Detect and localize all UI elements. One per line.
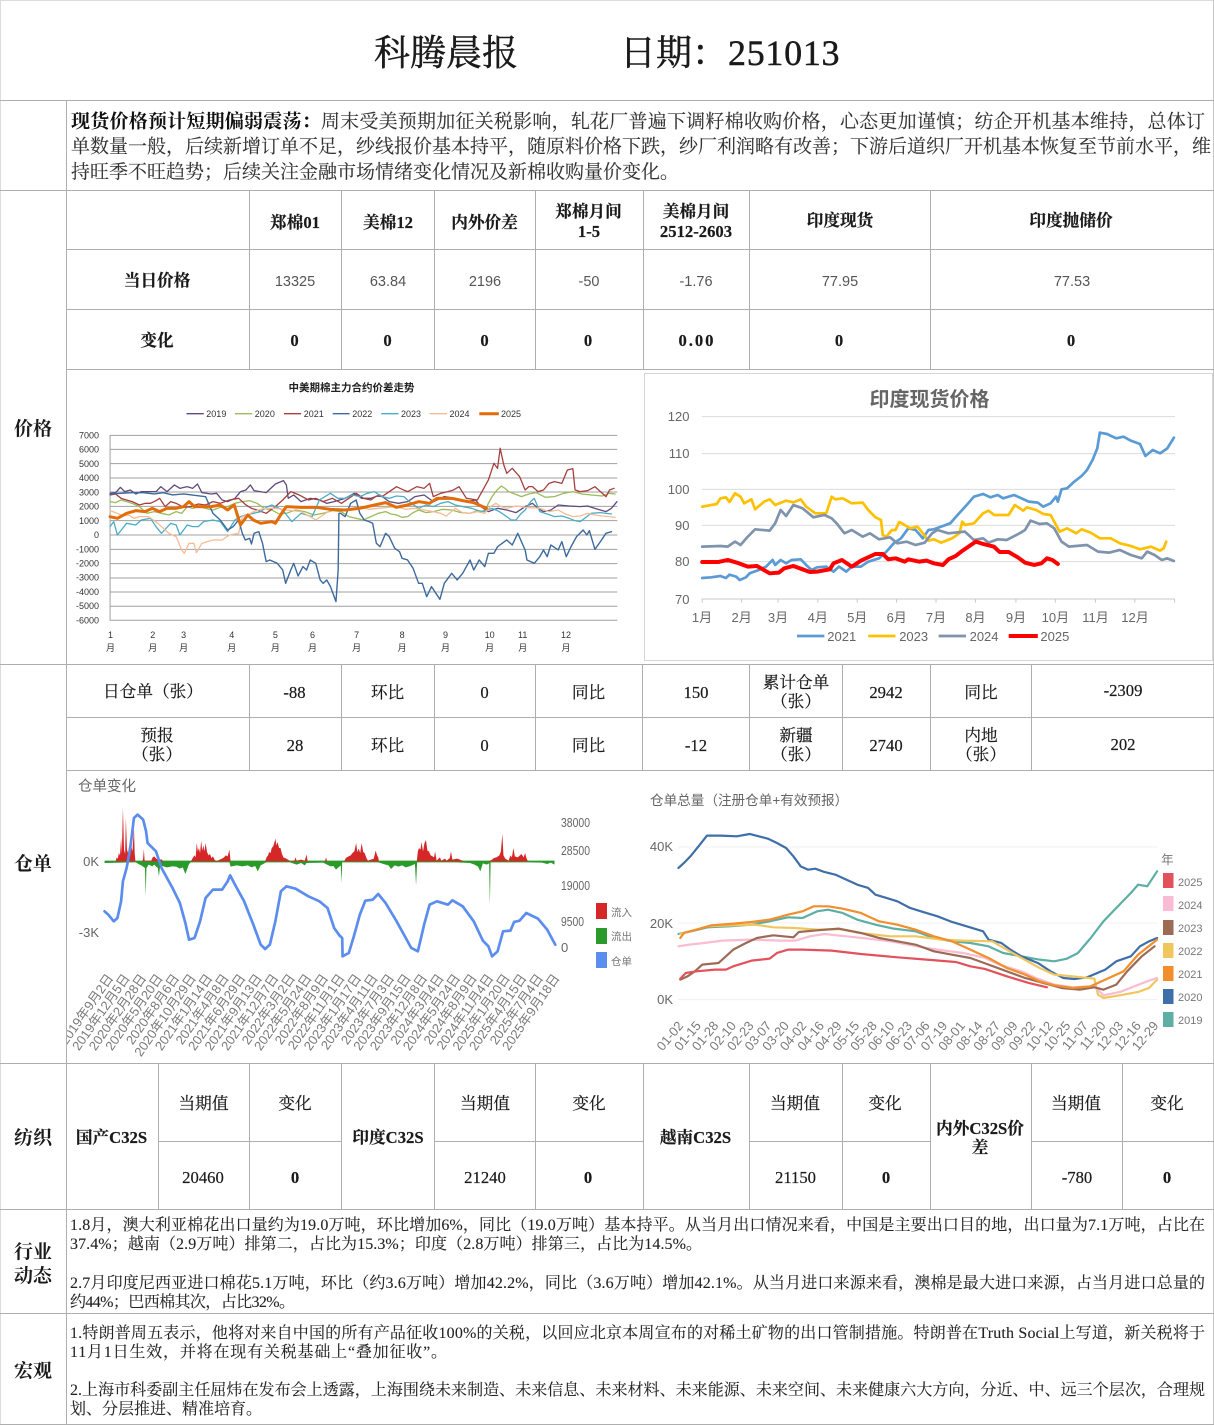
legend: 2025 — [1040, 629, 1069, 644]
daily receipts row: 累计仓单 — [763, 673, 830, 692]
section label: textile: 纺织 — [14, 1127, 54, 1149]
x axis labels — [692, 610, 1149, 625]
rotated date labels: 06-23 — [882, 1018, 915, 1053]
rotated date labels: 2021年4月8日 — [172, 971, 232, 1047]
right axis labels — [561, 815, 590, 955]
current price row — [124, 270, 1090, 290]
forecast row: -12 — [685, 736, 707, 755]
section label: price: 价格 — [14, 418, 52, 440]
summary paragraph: 现货价格预计短期偏弱震荡：周末受美预期加征关税影响，轧花厂普遍下调籽棉收购价格，心态更加谨慎；纺企开机基本维持，总体订 — [71, 110, 1205, 132]
forecast row: 环比 — [371, 736, 404, 755]
x axis month labels: 12 — [561, 630, 571, 640]
rotated date labels: 2020年8月6日 — [123, 971, 182, 1047]
price table — [124, 201, 1113, 350]
Vietnam C32S: 当期值 — [770, 1094, 820, 1113]
legend: 2021 — [304, 409, 324, 419]
y axis labels — [668, 409, 690, 607]
x axis month labels: 8 — [400, 630, 405, 640]
daily receipts row: -2309 — [1104, 681, 1142, 700]
y axis labels: -6000 — [76, 615, 99, 625]
x axis labels: 1月 — [692, 610, 712, 625]
rotated date labels: 2022年8月9日 — [272, 971, 331, 1047]
x axis month labels: 4 — [229, 630, 234, 640]
India C32S: 0 — [584, 1168, 592, 1187]
x axis month labels: 2 — [150, 630, 155, 640]
daily receipts row: 同比 — [964, 683, 998, 702]
India C32S: 印度C32S — [352, 1128, 424, 1147]
y axis labels: 120 — [668, 409, 690, 424]
section label: industry news: 动态 — [14, 1265, 54, 1287]
x axis month labels: 月 — [398, 643, 407, 653]
legend: 2025 — [501, 409, 521, 419]
y axis labels: 0 — [94, 530, 99, 540]
forecast row: 新疆 — [779, 726, 813, 745]
rotated date labels: 07-06 — [900, 1018, 933, 1053]
domestic vs overseas C32S spread: 0 — [1163, 1168, 1171, 1187]
domestic vs overseas C32S spread: -780 — [1062, 1168, 1092, 1187]
summary paragraph: 单数量一般，后续新增订单不足，纱线报价基本持平，随原料价格下跌，纱厂利润略有改善；下游后道织厂开机基本恢复至节前水平，维 — [71, 134, 1211, 158]
table header row: 印度现货 — [807, 210, 876, 230]
table header row: 郑棉01 — [270, 212, 320, 232]
x axis labels: 9月 — [1006, 610, 1026, 625]
rotated date labels: 01-28 — [689, 1018, 721, 1053]
rotated date labels: 02-10 — [706, 1018, 739, 1053]
y axis labels: 7000 — [79, 430, 99, 440]
chart: India spot price — [644, 374, 1212, 660]
forecast row: 预报 — [140, 726, 174, 745]
plot lines — [678, 834, 1157, 1000]
forecast row: 28 — [287, 736, 303, 755]
forecast row: （张） — [132, 745, 182, 764]
rotated date labels: 11-20 — [1076, 1018, 1109, 1053]
legend: 流出 — [611, 930, 632, 943]
table header row: 2512-2603 — [660, 222, 732, 241]
rotated date labels: 09-22 — [1005, 1018, 1038, 1053]
legend — [596, 903, 632, 968]
daily receipts row: -88 — [283, 683, 306, 702]
x axis month labels: 月 — [352, 643, 361, 653]
India C32S: 当期值 — [460, 1094, 510, 1113]
macro news text: 11月1日生效，并将在现有关税基础上“叠加征收”。 — [70, 1343, 447, 1361]
daily receipts row: 2942 — [869, 683, 903, 702]
macro news text: 划、分层推进、精准培育。 — [70, 1399, 262, 1418]
summary paragraph: 持旺季不旺趋势；后续关注金融市场情绪变化情况及新棉收购量价变化。 — [71, 161, 679, 183]
rotated date labels: 2023年7月3日 — [338, 971, 397, 1047]
rotated date labels: 08-14 — [953, 1018, 985, 1053]
x axis labels: 5月 — [847, 610, 867, 625]
legend — [1161, 853, 1202, 1027]
chart: total warehouse receipts — [650, 793, 1202, 1053]
domestic C32S — [76, 1094, 312, 1187]
title: 科腾晨报 — [374, 33, 518, 73]
x axis month labels: 9 — [443, 630, 448, 640]
bars and inventory line — [105, 807, 555, 956]
legend: 2019 — [1178, 1015, 1202, 1027]
rotated date labels: 2024年11月4日 — [433, 971, 496, 1052]
change row: 变化 — [140, 331, 174, 350]
rotated date labels: 2021年9月13日 — [201, 971, 265, 1053]
industry news text — [70, 1215, 1205, 1311]
y axis labels: 4000 — [79, 473, 99, 483]
industry news text: 37.4%；越南（2.9万吨）排第二，占比为15.3%；印度（2.8万吨）排第三，占比为14.5%。 — [70, 1235, 702, 1253]
legend: 2022 — [1178, 946, 1202, 958]
section label: macro: 宏观 — [14, 1360, 52, 1382]
chart title: 仓单变化 — [78, 778, 136, 795]
Vietnam C32S — [660, 1094, 902, 1187]
x axis month labels: 月 — [148, 643, 157, 653]
daily receipts row — [103, 673, 1142, 711]
rotated date labels: 2025年4月15日 — [466, 971, 530, 1053]
rotated date labels: 10-25 — [1041, 1018, 1073, 1053]
y axis labels: 0K — [657, 992, 673, 1007]
current price row: 13325 — [275, 274, 315, 290]
rotated date labels: 09-09 — [988, 1018, 1021, 1053]
chart: China-US cotton futures spread — [76, 381, 617, 653]
change row: 0 — [480, 331, 489, 350]
legend: 2023 — [1178, 923, 1202, 935]
y axis labels: -3000 — [76, 573, 99, 583]
current price row: -50 — [579, 274, 599, 290]
legend — [186, 409, 521, 419]
forecast row: （张） — [771, 745, 821, 764]
right axis labels: 19000 — [561, 878, 590, 893]
India C32S: 21240 — [464, 1168, 506, 1187]
legend: 年 — [1161, 853, 1174, 867]
rotated date labels — [657, 1020, 1158, 1051]
summary paragraph — [71, 110, 1211, 183]
Vietnam C32S: 0 — [882, 1168, 890, 1187]
rotated date labels: 05-28 — [847, 1018, 880, 1053]
change row: 0 — [835, 331, 843, 350]
table header row: 郑棉月间 — [555, 201, 622, 221]
y axis labels: 80 — [675, 554, 690, 569]
rotated date labels: 2025年1月20日 — [449, 971, 513, 1053]
daily receipts row: 环比 — [371, 683, 404, 702]
domestic C32S: 变化 — [278, 1094, 312, 1113]
domestic vs overseas C32S spread: 内外C32S价 — [936, 1118, 1024, 1138]
rotated date labels — [57, 971, 563, 1059]
legend: 流入 — [611, 906, 632, 919]
table header row: 内外价差 — [451, 212, 518, 232]
x axis month labels: 月 — [227, 643, 236, 653]
legend: 2023 — [899, 629, 928, 644]
x axis month labels: 月 — [179, 643, 188, 653]
forecast row — [132, 726, 1135, 764]
rotated date labels: 07-19 — [917, 1018, 950, 1053]
rotated date labels: 2022年11月1日 — [285, 971, 348, 1052]
y axis labels: 2000 — [79, 502, 99, 512]
change row: 0.00 — [678, 331, 714, 350]
India C32S: 变化 — [572, 1094, 606, 1113]
title: 日期：251013 — [620, 33, 840, 73]
x axis labels: 3月 — [768, 610, 788, 625]
change row: 0 — [383, 331, 392, 350]
x axis labels: 10月 — [1042, 610, 1069, 625]
rotated date labels: 2021年12月7日 — [218, 971, 282, 1053]
x axis month labels: 月 — [518, 643, 527, 653]
x axis labels: 4月 — [808, 610, 828, 625]
macro news text: 2.上海市科委副主任屈炜在发布会上透露，上海围绕未来制造、未来信息、未来材料、未来能源、未来空间、未来健康六大方向，分近、中、远三个层次，合理规 — [70, 1380, 1205, 1399]
rotated date labels: 08-01 — [935, 1018, 968, 1053]
rotated date labels: 2021年6月29日 — [185, 971, 249, 1053]
y axis labels: 20K — [650, 916, 673, 931]
industry news text: 约44%；巴西棉其次，占比32%。 — [70, 1293, 295, 1311]
domestic vs overseas C32S spread — [936, 1094, 1184, 1187]
table header row: 美棉12 — [363, 213, 413, 232]
rotated date labels: 11-07 — [1059, 1018, 1091, 1053]
rotated date labels: 05-15 — [829, 1018, 862, 1053]
table header row: 印度抛储价 — [1029, 210, 1113, 230]
x axis labels: 2月 — [731, 610, 752, 625]
x axis month labels: 月 — [441, 643, 450, 653]
rotated date labels: 10-12 — [1023, 1018, 1056, 1053]
change row: 0 — [1067, 331, 1075, 350]
y axis labels: 5000 — [79, 459, 99, 469]
x axis month labels: 月 — [271, 643, 280, 653]
x axis month labels: 月 — [561, 643, 571, 653]
x axis labels: 11月 — [1082, 610, 1109, 625]
x axis labels: 12月 — [1121, 610, 1149, 625]
Vietnam C32S: 变化 — [868, 1094, 902, 1113]
current price row: -1.76 — [679, 274, 713, 290]
rotated date labels: 2025年7月4日 — [487, 971, 546, 1047]
rotated date labels: 08-27 — [970, 1018, 1003, 1053]
rotated date labels: 2019年12月5日 — [69, 971, 133, 1053]
current price row: 63.84 — [370, 274, 406, 290]
table header row: 美棉月间 — [663, 202, 729, 221]
rotated date labels: 03-07 — [741, 1018, 774, 1053]
macro news text — [70, 1323, 1205, 1418]
y axis labels: 6000 — [79, 445, 99, 455]
rotated date labels: 2025年9月18日 — [499, 971, 563, 1053]
legend: 2021 — [1178, 969, 1202, 981]
right axis labels: 9500 — [561, 914, 584, 929]
chart title: 仓单总量（注册仓单+有效预报） — [650, 793, 848, 808]
Vietnam C32S: 越南C32S — [660, 1127, 731, 1147]
daily receipts row: 同比 — [572, 683, 605, 702]
forecast row: 0 — [480, 736, 489, 755]
x axis month labels: 5 — [273, 630, 278, 640]
y axis labels: 1000 — [79, 516, 99, 526]
y axis labels: 90 — [675, 518, 690, 533]
legend: 2025 — [1178, 877, 1202, 889]
domestic vs overseas C32S spread: 变化 — [1150, 1094, 1184, 1113]
rotated date labels: 12-16 — [1111, 1018, 1144, 1053]
industry news text: 2.7月印度尼西亚进口棉花5.1万吨，环比（约3.6万吨）增加42.2%，同比（3.6万吨）增加42.1%。从当月进口来源来看，澳棉是最大进口来源，占当月进口总量的 — [70, 1273, 1205, 1292]
legend: 2019 — [206, 409, 226, 419]
forecast row: 2740 — [869, 736, 903, 755]
warehouse receipt table — [103, 673, 1142, 764]
rotated date labels: 04-29 — [812, 1018, 845, 1053]
India C32S — [352, 1094, 606, 1187]
domestic vs overseas C32S spread: 当期值 — [1051, 1094, 1101, 1113]
left axis labels: 0K — [83, 854, 99, 869]
rotated date labels: 2023年4月11日 — [318, 971, 381, 1052]
legend: 2024 — [970, 629, 999, 644]
current price row: 77.53 — [1054, 274, 1090, 290]
rotated date labels: 06-10 — [865, 1018, 897, 1053]
y axis labels — [76, 430, 99, 625]
rotated date labels: 02-23 — [724, 1018, 757, 1053]
domestic C32S: 0 — [291, 1168, 299, 1187]
forecast row: 同比 — [572, 736, 605, 755]
rotated date labels: 2022年5月24日 — [251, 971, 315, 1053]
y axis labels: 3000 — [79, 487, 99, 497]
x axis labels: 6月 — [887, 610, 907, 625]
rotated date labels: 01-15 — [671, 1018, 704, 1053]
legend: 2024 — [450, 409, 470, 419]
x axis month labels: 月 — [106, 643, 115, 653]
y axis labels: 70 — [675, 592, 690, 607]
y axis labels — [650, 839, 673, 1007]
rotated date labels: 12-03 — [1093, 1018, 1126, 1053]
legend: 2024 — [1178, 900, 1202, 912]
table header row — [270, 201, 1113, 241]
rotated date labels: 2023年1月17日 — [301, 971, 364, 1053]
plot lines — [110, 435, 617, 620]
rotated date labels: 2020年10月29日 — [131, 971, 199, 1059]
daily receipts row: 150 — [684, 683, 708, 702]
yarn price table — [76, 1094, 1184, 1187]
section label: industry news — [14, 1241, 54, 1287]
y axis labels: -2000 — [76, 558, 99, 568]
legend — [797, 629, 1069, 644]
Vietnam C32S: 21150 — [775, 1168, 816, 1187]
forecast row: 202 — [1111, 735, 1135, 754]
rotated date labels: 2023年12月8日 — [367, 971, 430, 1053]
rotated date labels: 2024年8月9日 — [420, 971, 480, 1047]
section label: industry news: 行业 — [14, 1241, 52, 1263]
y axis labels: 100 — [668, 482, 690, 497]
legend: 仓单 — [611, 955, 632, 968]
domestic C32S: 20460 — [182, 1168, 224, 1187]
x axis month labels: 11 — [518, 630, 527, 640]
current price row: 2196 — [469, 274, 501, 290]
plot lines — [702, 417, 1175, 602]
chart title: 中美期棉主力合约价差走势 — [288, 381, 415, 394]
legend: 2022 — [352, 409, 372, 419]
rotated date labels: 2024年3月4日 — [387, 971, 447, 1047]
rotated date labels: 2022年3月2日 — [239, 971, 298, 1047]
domestic C32S: 国产C32S — [76, 1128, 147, 1147]
rotated date labels: 04-02 — [777, 1018, 809, 1053]
right axis labels: 38000 — [561, 815, 590, 830]
change row — [140, 331, 1075, 350]
x axis labels: 7月 — [926, 610, 946, 625]
macro news text: 1.特朗普周五表示，他将对来自中国的所有产品征收100%的关税，以回应北京本周宣布的对稀土矿物的出口管制措施。特朗普在Truth Social上写道，新关税将于 — [70, 1323, 1205, 1342]
rotated date labels: 04-16 — [794, 1018, 827, 1053]
section label: warehouse receipts: 仓单 — [14, 853, 52, 875]
y axis labels: -5000 — [76, 601, 99, 611]
right axis labels: 0 — [561, 940, 568, 955]
table header row: 1-5 — [578, 222, 600, 241]
daily receipts row: （张） — [771, 692, 821, 711]
title — [374, 33, 840, 73]
rotated date labels: 2024年5月24日 — [400, 971, 463, 1053]
legend: 2020 — [255, 409, 275, 419]
domestic C32S: 当期值 — [179, 1094, 229, 1113]
current price row: 当日价格 — [124, 270, 191, 290]
rotated date labels: 2021年1月14日 — [152, 971, 215, 1053]
rotated date labels: 03-20 — [759, 1018, 792, 1053]
industry news text: 1.8月，澳大利亚棉花出口量约为19.0万吨，环比增加6%，同比（19.0万吨）基本持平。从当月出口情况来看，中国是主要出口目的地，出口量为7.1万吨，占比在 — [70, 1215, 1205, 1234]
chart title: 印度现货价格 — [870, 387, 990, 411]
rotated date labels: 01-02 — [653, 1018, 686, 1053]
chart frame — [644, 374, 1212, 660]
change row: 0 — [290, 331, 299, 350]
right axis labels: 28500 — [561, 843, 590, 858]
x axis month labels: 3 — [181, 630, 186, 640]
rotated date labels: 2019年9月2日 — [57, 971, 116, 1047]
x axis month labels: 7 — [354, 630, 359, 640]
forecast row: 内地 — [964, 726, 998, 745]
forecast row: （张） — [956, 745, 1006, 764]
legend: 2020 — [1178, 992, 1202, 1004]
domestic vs overseas C32S spread: 差 — [972, 1137, 989, 1157]
current price row: 77.95 — [822, 274, 858, 290]
daily receipts row: 日仓单（张） — [103, 682, 203, 701]
rotated date labels: 2023年9月15日 — [350, 971, 414, 1053]
left axis labels — [79, 854, 99, 940]
chart: warehouse receipt change — [57, 778, 632, 1059]
y axis labels: 110 — [669, 446, 690, 461]
y axis labels: -1000 — [76, 544, 99, 554]
x axis month labels: 月 — [485, 643, 494, 653]
y axis labels: -4000 — [76, 587, 99, 597]
legend: 2021 — [827, 629, 856, 644]
x axis month labels: 月 — [308, 643, 317, 653]
change row: 0 — [584, 331, 592, 350]
daily receipts row: 0 — [480, 683, 489, 702]
x axis month labels: 1 — [108, 630, 113, 640]
left axis labels: -3K — [79, 925, 99, 940]
y axis labels: 40K — [650, 839, 673, 854]
x axis month labels — [106, 630, 571, 653]
rotated date labels: 2020年5月20日 — [102, 971, 166, 1053]
rotated date labels: 12-29 — [1129, 1018, 1161, 1053]
x axis month labels: 6 — [310, 630, 315, 640]
x axis month labels: 10 — [485, 630, 495, 640]
x axis labels: 8月 — [965, 610, 986, 625]
rotated date labels: 2020年2月28日 — [86, 971, 149, 1053]
legend: 2023 — [401, 409, 421, 419]
